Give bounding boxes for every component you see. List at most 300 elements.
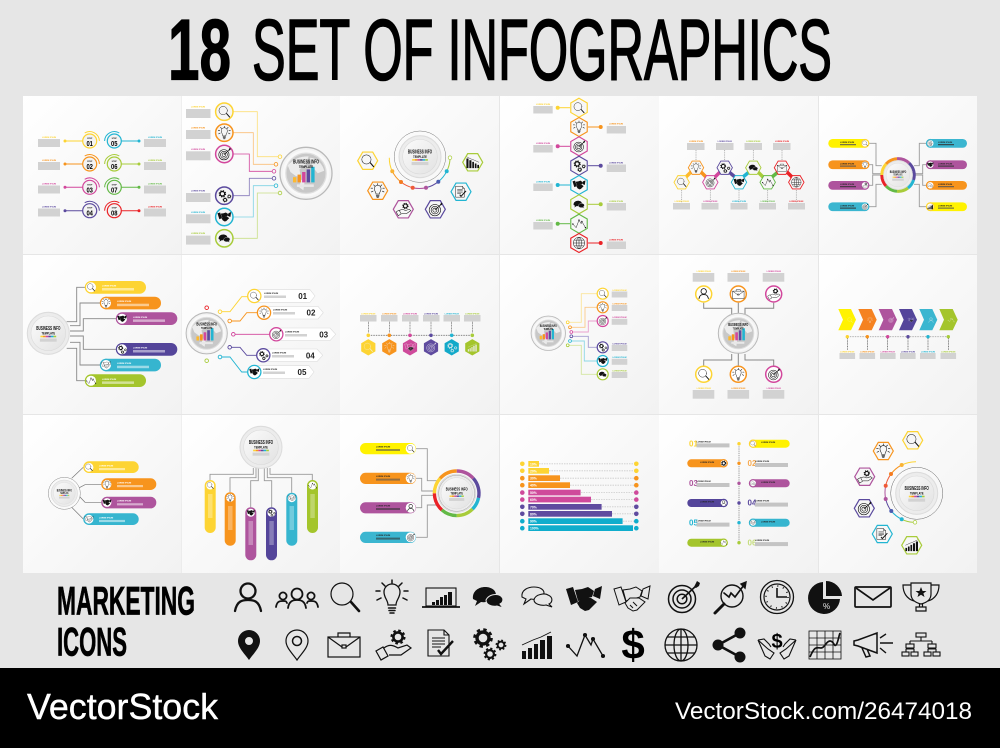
- panel 8: globe hub with arrow tags: [186, 289, 336, 379]
- connectors: [72, 467, 101, 519]
- icon: chat outline: [522, 587, 552, 607]
- stems: [368, 322, 472, 333]
- lower labels: [673, 190, 805, 210]
- hub: TEMPLATE: [60, 492, 69, 495]
- tag 02: [257, 306, 323, 319]
- panel 1: eight steps: [38, 132, 166, 218]
- step 08: [105, 201, 166, 218]
- hexagon: hand gear: [855, 468, 875, 485]
- icon: mail: [855, 587, 891, 607]
- step 05: 05: [111, 141, 118, 148]
- satellite: briefcase: LOREM IPSUM: [731, 271, 746, 273]
- thin ring: [891, 467, 943, 519]
- hexagon: target: [425, 201, 445, 218]
- icon: share: [712, 628, 746, 662]
- branch: search: [186, 103, 233, 120]
- node 2: LOREM IPSUM: [382, 313, 397, 315]
- branch 1: LOREM IPSUM: [612, 290, 627, 292]
- item 2: [571, 118, 626, 136]
- item 2: LOREM IPSUM: [609, 124, 623, 126]
- row 04: LOREM IPSUM: [700, 502, 714, 504]
- connectors: [416, 449, 438, 537]
- icon: pie chart: %: [823, 602, 830, 611]
- item 5: [533, 176, 587, 194]
- step 06: LOREM IPSUM: [148, 160, 162, 162]
- step 01: [38, 132, 99, 148]
- hexagon: search: [358, 152, 378, 169]
- item 4: [571, 156, 626, 175]
- stems and nodes: [846, 335, 950, 350]
- tag 03: [270, 328, 336, 341]
- icon: people: [276, 588, 318, 608]
- panel 16: horizontal percentage bars: [520, 461, 639, 531]
- bar 70%: 70%: [530, 505, 537, 509]
- right pills: LOREM IPSUM: [938, 142, 952, 144]
- panel backgrounds grid: [23, 96, 977, 573]
- connectors: [234, 112, 282, 238]
- item 1: LOREM IPSUM: [536, 104, 550, 106]
- icon: chart grid: [809, 631, 841, 659]
- step 04: [38, 201, 99, 218]
- step 06: 06: [111, 164, 118, 171]
- branch: target: LOREM IPSUM: [191, 149, 205, 151]
- icon: laptop chart: [422, 588, 460, 607]
- hexagon: search: [903, 432, 923, 449]
- title: 18: [168, 2, 231, 98]
- tag 02: 02: [307, 309, 316, 318]
- hexagon: idea: [368, 182, 388, 199]
- panel 3: hub with hexagon arc: [358, 131, 483, 218]
- row 02: 02: [748, 459, 757, 468]
- tag 05: [248, 365, 314, 379]
- dashed spine: [738, 444, 740, 543]
- connectors: [210, 468, 312, 507]
- title: [168, 2, 832, 98]
- hub: [27, 312, 69, 354]
- step 04: 04: [86, 211, 93, 218]
- item 1: [533, 98, 587, 117]
- left pills: LOREM IPSUM: [840, 142, 854, 144]
- pill 2: LOREM IPSUM: [117, 301, 131, 303]
- step 03: 03: [86, 187, 93, 194]
- row 02: LOREM IPSUM: [755, 461, 769, 463]
- hexagon 7: [760, 176, 775, 189]
- right pills: LOREM IPSUM: [938, 163, 952, 165]
- footer bar: [0, 668, 1000, 748]
- icon: map pin filled: [238, 630, 260, 660]
- satellite: hand gear: LOREM IPSUM: [767, 271, 781, 273]
- tag 05: LOREM IPSUM: [263, 369, 277, 371]
- step 08: LOREM IPSUM: [148, 206, 162, 208]
- hub: [240, 426, 282, 468]
- pill cyan: LOREM IPSUM: [376, 535, 390, 537]
- icon: line wave: [567, 634, 604, 657]
- hub: BUSINESS INFO: [36, 326, 60, 332]
- globe hub: [531, 316, 566, 350]
- bar 40%: 40%: [530, 484, 537, 488]
- connectors: [869, 143, 926, 207]
- row 01: 01: [689, 440, 698, 448]
- globe hub: BUSINESS INFO: [540, 324, 557, 328]
- tag 01: LOREM IPSUM: [264, 293, 278, 295]
- pill 3: [116, 312, 177, 325]
- arc with dots: [884, 462, 917, 524]
- step 07: [105, 178, 166, 194]
- step 04: LOREM IPSUM: [42, 206, 56, 208]
- dashed axis: [847, 336, 948, 338]
- pill 6: LOREM IPSUM: [102, 379, 116, 381]
- node 3: LOREM IPSUM: [403, 313, 417, 315]
- branch: idea: [186, 124, 233, 141]
- ring around hub: [394, 131, 446, 182]
- bar 90%: 90%: [530, 520, 537, 524]
- ring hub: [882, 159, 914, 191]
- tag 03: LOREM IPSUM: [285, 332, 299, 334]
- icon: hands with dollar: $: [771, 631, 783, 653]
- heading: marketing icons: [57, 580, 195, 664]
- panel 4: vertical hexagon timeline: [533, 98, 626, 252]
- branch 3: LOREM IPSUM: [612, 317, 627, 319]
- icon: dollar: $: [621, 621, 645, 668]
- branch: chat: [186, 230, 233, 247]
- upper labels: LOREM IPSUM: [689, 141, 703, 143]
- hexagon: target: [854, 500, 874, 517]
- labels: LOREM IPSUM: [921, 352, 935, 354]
- pill 6: [85, 374, 146, 387]
- satellite: idea: LOREM IPSUM: [731, 388, 746, 390]
- lower labels: LOREM IPSUM: [789, 201, 804, 203]
- heading: marketing icons: MARKETING: [57, 580, 195, 624]
- tag 01: [248, 289, 315, 303]
- hub: TEMPLATE: [413, 155, 427, 159]
- connectors and dots: [205, 297, 270, 372]
- branch 5: LOREM IPSUM: [612, 357, 627, 359]
- hexagon 1: [674, 176, 689, 189]
- panel 2: globe hub with six branches: [186, 103, 332, 247]
- pill yellow: LOREM IPSUM: [99, 466, 113, 468]
- step 07: 07: [111, 187, 118, 194]
- bar 80%: 80%: [530, 512, 537, 516]
- dashed guides: [539, 464, 634, 521]
- icon: chat filled: [473, 587, 503, 608]
- row 01: [689, 440, 790, 448]
- row 06: [687, 538, 788, 548]
- pill 1: [85, 281, 146, 294]
- icon: map pin outline: [286, 630, 308, 660]
- row 04: LOREM IPSUM: [755, 500, 769, 502]
- hexagon 6: [746, 161, 761, 174]
- labels: LOREM IPSUM: [901, 352, 915, 354]
- hexagon 2: [688, 161, 704, 174]
- icon: document check: [428, 630, 453, 656]
- pill 2: [100, 297, 161, 309]
- node 4: LOREM IPSUM: [424, 313, 438, 315]
- row 05: LOREM IPSUM: [696, 520, 711, 522]
- bar 50%: 50%: [530, 491, 537, 495]
- panel 17: central timeline with pills and text: [687, 440, 790, 548]
- hub centre: TEMPLATE: [893, 174, 903, 177]
- column deep purple: [266, 507, 277, 560]
- segmented ring: [434, 471, 479, 516]
- pill 3: LOREM IPSUM: [133, 317, 147, 319]
- icon: handshake filled: [566, 586, 602, 611]
- step 02: 02: [86, 164, 93, 171]
- pill cyan: LOREM IPSUM: [99, 517, 113, 519]
- hub centre: [884, 161, 912, 189]
- row 05: LOREM IPSUM: [761, 521, 775, 523]
- upper labels: LOREM IPSUM: [746, 141, 761, 143]
- hub: BUSINESS INFO: [249, 440, 273, 446]
- row 04: 04: [748, 498, 757, 508]
- icon: target: [668, 581, 700, 612]
- panel 10: globe hub with six thin branches: [531, 288, 627, 380]
- step 02: LOREM IPSUM: [42, 160, 56, 162]
- bar 30%: 30%: [530, 477, 537, 481]
- branch: gears: LOREM IPSUM: [191, 190, 205, 192]
- upper labels: LOREM IPSUM: [775, 141, 789, 143]
- hub centre: BUSINESS INFO: [890, 170, 906, 174]
- item 3: [533, 137, 587, 156]
- pill 1: LOREM IPSUM: [102, 286, 116, 288]
- hexagon: document: [451, 183, 471, 200]
- item 5: LOREM IPSUM: [536, 182, 550, 184]
- panel 5: zigzag hexagon chain: [673, 141, 805, 210]
- hexagon: hand gear: [393, 201, 413, 218]
- pill orange: LOREM IPSUM: [376, 476, 390, 478]
- branch: search: LOREM IPSUM: [191, 106, 205, 108]
- icon: hands with dollar: [758, 631, 796, 659]
- row 06: 06: [748, 538, 757, 548]
- pill 5: [100, 359, 161, 371]
- item 8: LOREM IPSUM: [609, 240, 623, 242]
- branch 2: LOREM IPSUM: [612, 303, 627, 305]
- icon: briefcase: [328, 633, 360, 657]
- tag 04: LOREM IPSUM: [272, 352, 286, 354]
- hexagon 5: [731, 176, 747, 189]
- chevrons: [838, 309, 958, 330]
- hub: BUSINESS INFO: [905, 486, 929, 492]
- lower labels: LOREM IPSUM: [703, 201, 718, 203]
- satellite: search: LOREM IPSUM: [697, 388, 711, 390]
- row 06: LOREM IPSUM: [755, 540, 769, 542]
- hub: [399, 136, 441, 178]
- panel 6: coloured ring hub with eight pills: [828, 139, 967, 211]
- pill orange: LOREM IPSUM: [117, 482, 131, 484]
- hub: TEMPLATE: [254, 445, 268, 449]
- tag 01: 01: [298, 292, 308, 301]
- icon: gears: [475, 630, 506, 659]
- item 8: [571, 234, 626, 252]
- right pills: LOREM IPSUM: [938, 184, 952, 186]
- chain connectors: [686, 172, 792, 177]
- hexagon: document: [872, 525, 892, 543]
- bar 60%: 60%: [530, 498, 537, 502]
- row 01: LOREM IPSUM: [696, 442, 711, 444]
- tag 04: [257, 349, 323, 362]
- tag 03: 03: [319, 330, 329, 339]
- hexagon: bars: [902, 537, 922, 554]
- left pills: LOREM IPSUM: [840, 205, 854, 207]
- pill purple: LOREM IPSUM: [376, 505, 390, 507]
- heading: marketing icons: ICONS: [57, 620, 127, 664]
- connectors: [67, 287, 116, 381]
- step 06: [105, 155, 166, 171]
- panel 13: small hub with four pills: [48, 461, 156, 525]
- hub: [51, 480, 78, 506]
- satellite: target: LOREM IPSUM: [767, 388, 781, 390]
- hexagon: bars: [463, 154, 483, 171]
- panel 9: hexagon timeline: [360, 313, 480, 356]
- icon: bar growth: [522, 632, 552, 659]
- step 02: STEP: [87, 161, 93, 163]
- hub: [438, 474, 476, 512]
- row 04: [687, 498, 788, 508]
- icon: pie chart: [808, 581, 842, 614]
- hexagon 3: [703, 176, 718, 189]
- icon: person: [235, 584, 261, 611]
- pill purple: LOREM IPSUM: [117, 501, 131, 503]
- left pills: LOREM IPSUM: [840, 163, 854, 165]
- panel 12: chevron timeline: [838, 309, 958, 359]
- row 06: LOREM IPSUM: [700, 541, 714, 543]
- lower labels: LOREM IPSUM: [732, 201, 746, 203]
- step 05: STEP: [112, 138, 118, 140]
- step 08: 08: [111, 211, 118, 218]
- icon: handshake outline: [614, 586, 650, 611]
- step 03: STEP: [87, 184, 93, 186]
- hub: BUSINESS INFO: [57, 488, 72, 492]
- globe hub: TEMPLATE: [544, 328, 553, 331]
- icon: globe: [665, 629, 697, 661]
- node 1: LOREM IPSUM: [361, 313, 376, 315]
- footer logo: VectorStock: [27, 686, 219, 727]
- globe hub: TEMPLATE: [201, 326, 213, 330]
- column orange: [225, 492, 236, 546]
- step 08: STEP: [112, 208, 118, 210]
- step 04: STEP: [87, 208, 93, 210]
- step 05: LOREM IPSUM: [148, 137, 162, 139]
- connectors: [704, 303, 774, 366]
- branch: gears: [186, 187, 233, 204]
- globe hub: TEMPLATE: [299, 165, 314, 169]
- hub: [896, 472, 938, 514]
- branch: target: [186, 145, 233, 163]
- globe hub: [718, 313, 758, 353]
- icon: trophy: [903, 583, 939, 611]
- globe hub: BUSINESS INFO: [196, 322, 217, 327]
- labels: LOREM IPSUM: [881, 352, 895, 354]
- spine dots: [737, 442, 741, 544]
- bar 10%: 10%: [530, 462, 537, 466]
- icon: search: [331, 583, 359, 611]
- lower labels: LOREM IPSUM: [761, 201, 775, 203]
- row 02: LOREM IPSUM: [700, 462, 714, 464]
- node 5: LOREM IPSUM: [445, 313, 459, 315]
- dashed axis: [368, 334, 472, 336]
- item 6: LOREM IPSUM: [609, 201, 623, 203]
- branch: handshake: [186, 208, 233, 226]
- panel 7: hub with staggered pills: [27, 281, 177, 387]
- panel 18: hub with left hexagon arc: [854, 432, 943, 554]
- branch 6: LOREM IPSUM: [612, 370, 627, 372]
- pill 4: [116, 343, 177, 356]
- row 03: 03: [689, 479, 698, 488]
- item 7: LOREM IPSUM: [536, 220, 550, 222]
- row 03: [689, 479, 790, 488]
- row 01: LOREM IPSUM: [761, 442, 775, 444]
- node 6: LOREM IPSUM: [465, 313, 480, 315]
- globe hub: BUSINESS INFO: [728, 322, 749, 327]
- hub: TEMPLATE: [910, 491, 924, 495]
- icon: clock: [760, 580, 794, 614]
- labels: LOREM IPSUM: [860, 352, 875, 354]
- hexagon 8: [774, 161, 790, 174]
- thin ring: [48, 477, 80, 509]
- row 03: LOREM IPSUM: [761, 482, 775, 484]
- pill 5: LOREM IPSUM: [117, 363, 131, 365]
- step 01: 01: [86, 141, 93, 148]
- bar 20%: 20%: [530, 469, 537, 473]
- hexagon 4: [717, 161, 732, 174]
- row 05: [689, 518, 790, 528]
- upper labels: [687, 141, 790, 160]
- globe hub: [280, 147, 332, 199]
- tag 02: LOREM IPSUM: [273, 310, 287, 312]
- satellite: person: LOREM IPSUM: [697, 271, 711, 273]
- tag 04: 04: [306, 351, 315, 360]
- icon: hand with gear: [376, 631, 411, 660]
- globe hub: [186, 313, 227, 354]
- left pills: LOREM IPSUM: [840, 184, 854, 186]
- globe hub: TEMPLATE: [733, 326, 744, 330]
- column cyan: [286, 493, 297, 546]
- footer url: VectorStock.com/26474018: [675, 698, 972, 725]
- panel 15: segmented ring with left pills: [360, 443, 479, 543]
- right pills: LOREM IPSUM: [938, 205, 952, 207]
- step 01: STEP: [87, 138, 93, 140]
- row 03: LOREM IPSUM: [696, 481, 711, 483]
- branch: handshake: LOREM IPSUM: [191, 212, 205, 214]
- step 07: STEP: [112, 184, 118, 186]
- panel 11: globe hub with six satellites: [693, 271, 784, 399]
- hub: BUSINESS INFO: [446, 486, 468, 492]
- branch 4: LOREM IPSUM: [612, 343, 627, 345]
- row 05: 05: [689, 518, 698, 528]
- right pills: [926, 139, 967, 211]
- step 06: STEP: [112, 161, 118, 163]
- row 02: [687, 459, 788, 468]
- branch: chat: LOREM IPSUM: [191, 233, 205, 235]
- icon: light bulb: [376, 580, 408, 613]
- pill yellow: LOREM IPSUM: [376, 446, 390, 448]
- step 01: LOREM IPSUM: [42, 137, 56, 139]
- step 02: [38, 155, 99, 171]
- step 03: LOREM IPSUM: [42, 184, 56, 186]
- hub: TEMPLATE: [451, 491, 463, 495]
- hub: TEMPLATE: [41, 331, 56, 335]
- tag 05: 05: [298, 368, 307, 377]
- connector ends: [566, 321, 573, 347]
- pill 4: LOREM IPSUM: [133, 348, 147, 350]
- column lime: [307, 480, 318, 533]
- branch: idea: LOREM IPSUM: [191, 128, 205, 130]
- labels: [840, 352, 956, 359]
- lower labels: LOREM IPSUM: [675, 201, 689, 203]
- left pills: [828, 139, 869, 211]
- item 4: LOREM IPSUM: [609, 162, 623, 164]
- upper labels: LOREM IPSUM: [718, 141, 732, 143]
- hexagon 9: [789, 176, 804, 189]
